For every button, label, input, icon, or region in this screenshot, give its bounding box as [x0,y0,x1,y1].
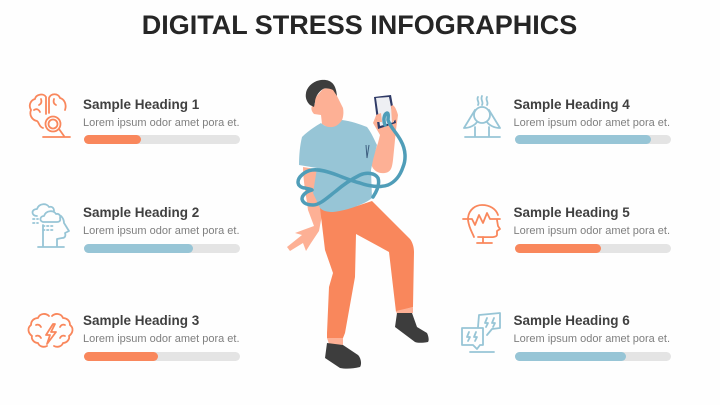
illustration: man tangled by phone cable [287,80,429,369]
progress bar [515,135,671,144]
shoes [325,313,429,369]
heading: Sample Heading 1 [83,97,200,112]
icon: speech bubbles with lightning [462,313,500,352]
cuffs [327,307,413,345]
shirt [299,120,377,212]
progress bar [84,135,240,144]
icon: head with rain cloud [32,204,69,247]
panel: item 6 [462,313,671,361]
left arm and hand [287,167,323,251]
panel: item 2 [32,204,240,253]
text: Lorem ipsum odor amet pora et. [83,333,240,345]
panel: item 4 [464,96,671,144]
icon: person holding head [464,96,500,137]
icon: brain with lightning [28,314,73,347]
heading: Sample Heading 3 [83,313,200,328]
right arm [371,105,398,173]
text: Lorem ipsum odor amet pora et. [83,117,240,129]
text: Lorem ipsum odor amet pora et. [514,333,670,345]
hair [306,80,337,107]
neck and face [311,88,343,130]
text: Lorem ipsum odor amet pora et. [514,117,670,129]
heading: Sample Heading 5 [514,205,630,220]
pocket detail [366,145,369,158]
icon: head with pulse [463,205,500,243]
panel: item 5 [463,205,671,253]
icon: brain with magnifier [30,94,70,137]
phone [374,95,397,129]
heading: Sample Heading 6 [514,313,630,328]
heading: Sample Heading 4 [514,97,630,112]
progress bar [84,244,240,253]
cable loop [298,113,405,205]
panel: item 1 [30,94,240,144]
text: Lorem ipsum odor amet pora et. [514,225,670,237]
title: DIGITAL STRESS INFOGRAPHICS [142,10,577,40]
panel: item 3 [28,313,240,361]
progress bar [84,352,240,361]
text: Lorem ipsum odor amet pora et. [83,225,240,237]
progress bar [515,244,671,253]
progress bar [515,352,671,361]
pants [320,201,414,338]
heading: Sample Heading 2 [83,205,199,220]
